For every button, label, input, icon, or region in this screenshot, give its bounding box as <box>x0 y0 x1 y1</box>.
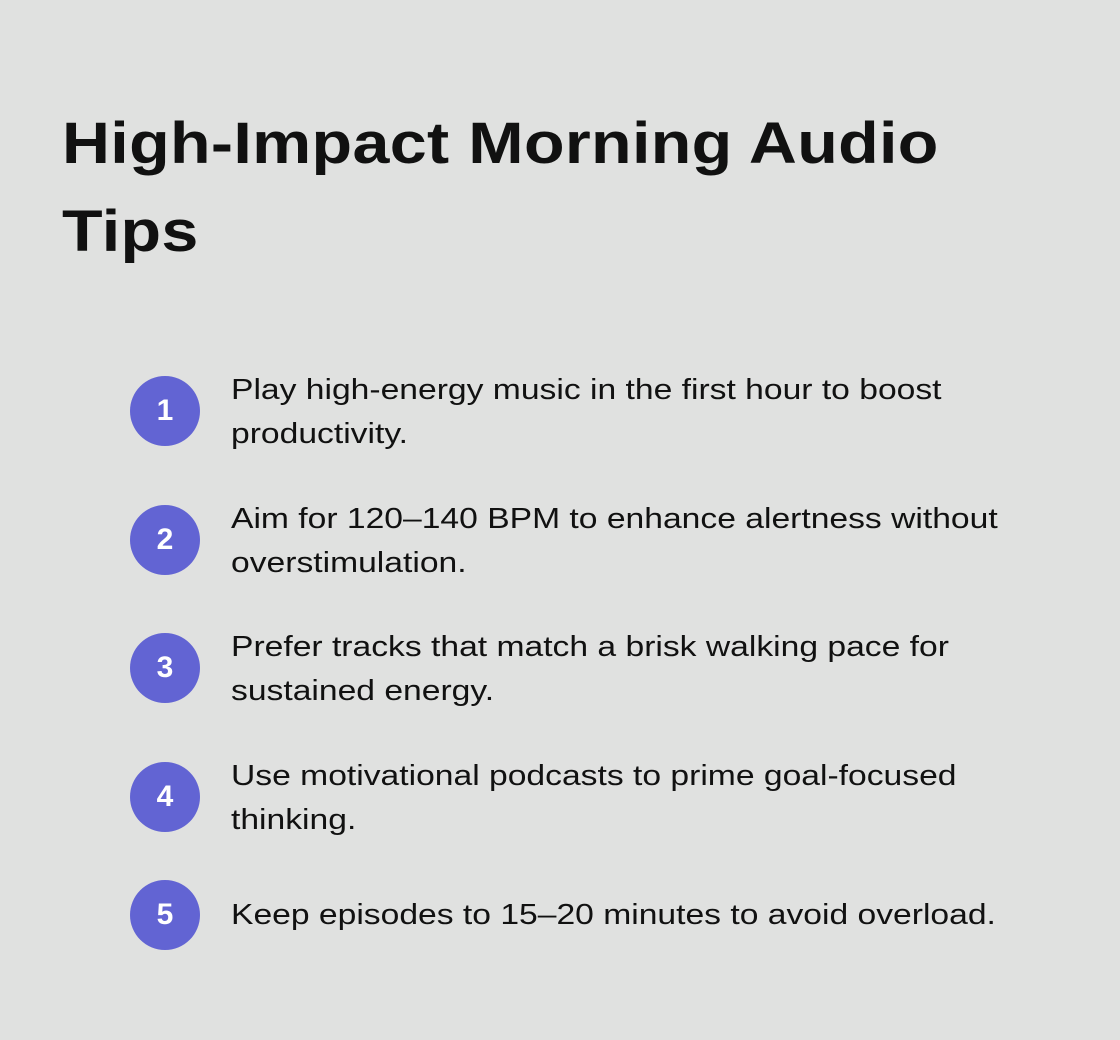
item 2 <box>130 503 998 579</box>
text 4 <box>231 760 957 836</box>
text 4: thinking. <box>231 804 356 836</box>
badge 3: 3 <box>157 651 173 684</box>
text 1: productivity. <box>231 418 408 450</box>
badge 5: 5 <box>157 898 173 931</box>
text 3 <box>231 631 949 707</box>
badge 4: 4 <box>157 780 173 813</box>
text 1 <box>231 374 942 450</box>
text 4: Use motivational podcasts to prime goal-focused <box>231 760 957 792</box>
text 1: Play high-energy music in the first hour to boost <box>231 374 942 406</box>
badge 3 <box>130 633 200 703</box>
badge 2 <box>130 505 200 575</box>
title: High-Impact Morning Audio <box>62 111 939 176</box>
badge 1 <box>130 376 200 446</box>
text 3: Prefer tracks that match a brisk walking pace for <box>231 631 949 663</box>
badge 5 <box>130 880 200 950</box>
text 3: sustained energy. <box>231 675 494 707</box>
item 4 <box>130 760 957 836</box>
item 3 <box>130 631 949 707</box>
text 5: Keep episodes to 15–20 minutes to avoid overload. <box>231 899 996 931</box>
badge 4 <box>130 762 200 832</box>
text 2: Aim for 120–140 BPM to enhance alertness without <box>231 503 998 535</box>
title <box>62 111 939 264</box>
text 2 <box>231 503 998 579</box>
badge 2: 2 <box>157 523 173 556</box>
item 5 <box>130 880 996 950</box>
badge 1: 1 <box>157 394 173 427</box>
text 2: overstimulation. <box>231 547 467 579</box>
item 1 <box>130 374 942 450</box>
title: Tips <box>62 199 199 264</box>
